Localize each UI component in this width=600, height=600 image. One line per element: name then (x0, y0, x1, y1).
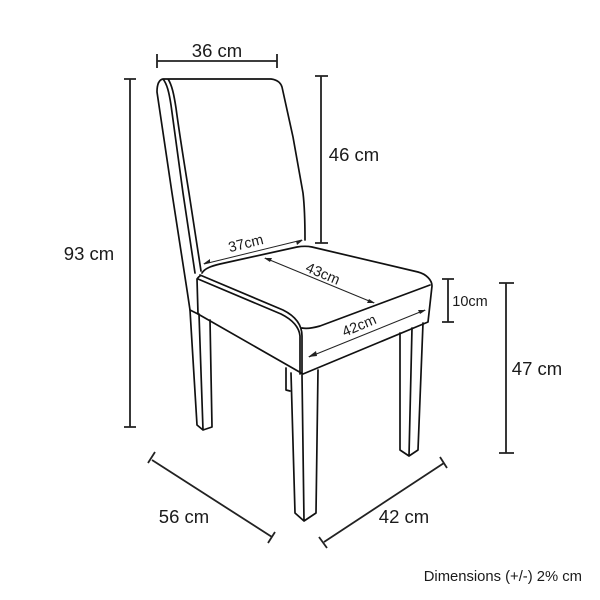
leg: rear hidden (286, 368, 290, 391)
dimension: back height 46 cm: 46 cm (329, 144, 379, 165)
leg: back right (400, 323, 423, 456)
dimension: seat height 47 cm: 47 cm (512, 358, 562, 379)
dimension: back height 46 cm (315, 76, 379, 243)
dimension: seat depth 43cm: 43cm (303, 260, 342, 289)
dimension: chair top width 36 cm: 36 cm (192, 40, 242, 61)
seat cushion (197, 246, 432, 374)
dimension: depth 56 cm (148, 452, 275, 543)
dimension: seat depth 43cm (264, 258, 375, 303)
dimension: seat front width 42cm (308, 310, 426, 357)
dimension: total height 93 cm: 93 cm (64, 243, 114, 264)
dimension: total height 93 cm (64, 79, 136, 427)
dimension: depth 56 cm: 56 cm (159, 506, 209, 527)
dimension: seat height 47 cm (499, 283, 562, 453)
leg: front (291, 370, 318, 521)
chair back (157, 79, 305, 314)
dimension: seat back width 37cm: 37cm (227, 232, 265, 256)
dimension: chair top width 36 cm (157, 40, 277, 68)
dimension: seat back width 37cm (203, 232, 303, 264)
dimension: cushion thickness 10cm: 10cm (452, 294, 488, 310)
dimension: width 42 cm: 42 cm (379, 506, 429, 527)
dimension: width 42 cm (319, 457, 447, 548)
footnote: Dimensions (+/-) 2% cm (424, 569, 582, 585)
leg: back left (190, 310, 212, 430)
dimension: cushion thickness 10cm (442, 279, 488, 322)
dimension: seat front width 42cm: 42cm (340, 312, 379, 341)
chair illustration (157, 79, 432, 521)
